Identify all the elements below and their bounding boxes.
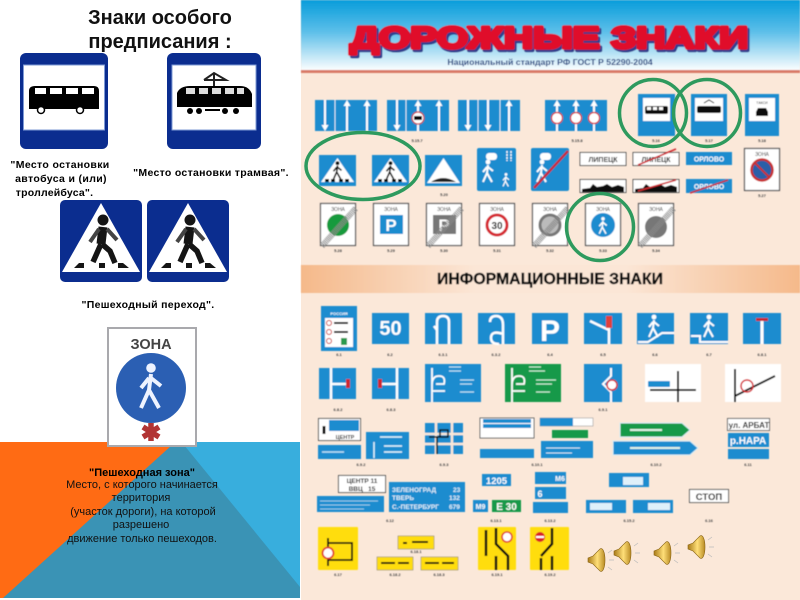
info row two: 6.8.2 (334, 407, 343, 412)
info row one: 6.3.1 (439, 352, 448, 357)
text block: pedestrian zone description: Место, с которого начинается (66, 479, 218, 491)
info row four: ТВЕРЬ (392, 495, 414, 502)
icon: speaker two (614, 542, 640, 564)
tram stop sign small (691, 94, 727, 143)
info row three: 6.10.2 (650, 462, 662, 467)
icon: speaker four (688, 536, 714, 558)
info row one: 6.5 (600, 352, 607, 357)
panel: road signs poster (301, 0, 800, 600)
info row one: 6.8.1 (758, 352, 767, 357)
info row four: 6.13.1 (490, 518, 502, 523)
info row four: 23 (453, 487, 461, 494)
icon: speaker three (654, 542, 680, 564)
info row four: 1205 (486, 476, 508, 487)
orange wedge (0, 442, 300, 598)
info row one: 6.3.2 (492, 352, 501, 357)
caption: bus stop (10, 159, 110, 199)
row three: zone signs: 30 (491, 221, 503, 232)
info row five: yellow signs: 6.19.1 (491, 572, 503, 577)
row three: zone signs: 5.28 (334, 248, 343, 253)
icon: tram stop sign (167, 53, 261, 149)
info row one: 50 (379, 318, 402, 340)
text block: pedestrian zone description: движение только пешеходов. (67, 533, 217, 545)
info row three: 6.9.2 (357, 462, 366, 467)
row three: zone signs: P (385, 216, 397, 235)
info row five: yellow signs: 6.17 (334, 572, 343, 577)
poster header sky (301, 0, 800, 71)
icon: bus stop sign (20, 53, 108, 149)
section band: information signs (301, 265, 800, 293)
section band: information signs: ИНФОРМАЦИОННЫЕ ЗНАКИ (437, 271, 663, 288)
row three: zone signs: P (438, 216, 450, 235)
taxi stand sign (745, 94, 779, 143)
caption: bus stop: троллейбуса". (16, 187, 93, 199)
info row one: P (540, 315, 560, 348)
info row four: 132 (449, 495, 460, 502)
caption: tram stop: "Место остановки трамвая". (133, 167, 289, 179)
caption: pedestrian crossing: "Пешеходный переход". (81, 299, 215, 311)
living zone sign (477, 148, 516, 191)
panel: slide background left (0, 0, 300, 600)
icon: pedestrian crossing sign two (147, 200, 229, 282)
info row four: ЗЕЛЕНОГРАД (392, 487, 436, 494)
info row three (318, 418, 770, 467)
caption: bus stop: автобуса и (или) (15, 173, 107, 185)
info row three: ЦЕНТР (336, 435, 355, 441)
info row three: 6.10.1 (531, 462, 543, 467)
town name plates (580, 149, 732, 193)
info row one: РОССИЯ (330, 311, 348, 316)
info row two: 6.9.1 (599, 407, 608, 412)
bus stop sign small (638, 94, 675, 143)
info row four: 6.13.2 (544, 518, 556, 523)
info row four: 6.15.2 (623, 518, 635, 523)
highlight circle: pedestrian zone (566, 194, 634, 260)
text block: pedestrian zone description: территория (112, 492, 170, 504)
bus stop sign small: 5.16 (652, 138, 661, 143)
town name plates: ЛИПЕЦК (588, 157, 618, 164)
poster subtitle: Национальный стандарт РФ ГОСТ Р 52290-2004 (447, 57, 653, 67)
info row five: yellow signs: 6.18.3 (433, 572, 445, 577)
info row four: С.-ПЕТЕРБУРГ (392, 504, 439, 511)
taxi stand sign: 5.18 (758, 138, 767, 143)
caption: bus stop: "Место остановки (10, 159, 110, 171)
info row five: yellow signs (318, 527, 569, 577)
row three: zone signs: 5.32 (546, 248, 555, 253)
info row one (321, 306, 781, 357)
text block: pedestrian zone description (66, 467, 218, 545)
icon: speaker one (588, 549, 614, 571)
highlight circle: bus stop (620, 80, 686, 146)
info row four: ЦЕНТР 11 (347, 478, 378, 485)
info row five: yellow signs: 6.18.2 (389, 572, 401, 577)
info row four: E 30 (496, 502, 517, 513)
row three: zone signs: 5.31 (493, 248, 502, 253)
row one: lane signs (315, 100, 607, 143)
info row three: 6.11 (744, 462, 753, 467)
row three: zone signs (320, 204, 674, 253)
info row one: 6.7 (706, 352, 713, 357)
row three: zone signs: 5.34 (652, 248, 661, 253)
row three: zone signs: 5.30 (440, 248, 449, 253)
dark teal triangle (3, 445, 300, 598)
town name plates: ОРЛОВО (694, 184, 725, 191)
poster title: ДОРОЖНЫЕ ЗНАКИ (350, 20, 748, 55)
row one: lane signs: 5.15.7 (411, 138, 423, 143)
speed bump sign: 5.20 (440, 192, 449, 197)
no parking zone sign (744, 148, 780, 198)
row two: crossing signs (319, 155, 409, 186)
info row five: yellow signs: 6.18.1 (410, 549, 422, 554)
info row four (317, 472, 728, 523)
info row four: 6 (537, 489, 543, 499)
highlight circle: tram stop (674, 80, 740, 146)
light blue wedge (172, 442, 300, 598)
info row five: yellow signs: 6.19.2 (544, 572, 556, 577)
icon: pedestrian crossing sign one (60, 200, 142, 282)
town name plates: ЛИПЕЦК (641, 157, 671, 164)
row three: zone signs: 5.33 (599, 248, 608, 253)
icon: pedestrian zone sign (108, 328, 196, 446)
row one: lane signs: 5.15.8 (571, 138, 583, 143)
info row four: ВВЦ 15 (349, 486, 376, 493)
icon: pedestrian zone sign: ЗОНА (130, 337, 172, 353)
town name plates: ОРЛОВО (694, 156, 725, 164)
info row four: 679 (449, 504, 460, 511)
info row three: р.НАРА (730, 436, 766, 447)
poster title: ДОРОЖНЫЕ ЗНАКИ (352, 22, 750, 58)
speed bump sign (425, 155, 462, 197)
info row four: 6.12 (386, 518, 395, 523)
info row one: 6.6 (652, 352, 659, 357)
text block: pedestrian zone description: (участок дороги), на которой (70, 506, 216, 518)
heading: special regulation signs: Знаки особого (88, 7, 232, 29)
info row four: 6.16 (705, 518, 714, 523)
info row one: 6.4 (547, 352, 554, 357)
info row four: СТОП (696, 492, 722, 503)
info row three: ул. АРБАТ (729, 421, 769, 430)
info row two (319, 364, 781, 412)
row three: zone signs: 5.29 (387, 248, 396, 253)
tram stop sign small: 5.17 (705, 138, 714, 143)
taxi stand sign: ТАКСИ (756, 101, 768, 105)
no parking zone sign: 5.27 (758, 193, 767, 198)
info row two: 6.8.3 (387, 407, 396, 412)
text block: pedestrian zone description: разрешено (113, 519, 169, 531)
info row one: 6.1 (336, 352, 343, 357)
highlight ellipse: crossing signs (306, 132, 420, 200)
info row three: 6.9.3 (440, 462, 449, 467)
info row four: М9 (476, 504, 485, 511)
heading line two: предписания : (88, 31, 232, 53)
info row four: М6 (555, 476, 565, 483)
text block: pedestrian zone description: "Пешеходная зона" (89, 467, 195, 479)
living zone end sign (531, 148, 569, 191)
info row one: 6.2 (387, 352, 394, 357)
